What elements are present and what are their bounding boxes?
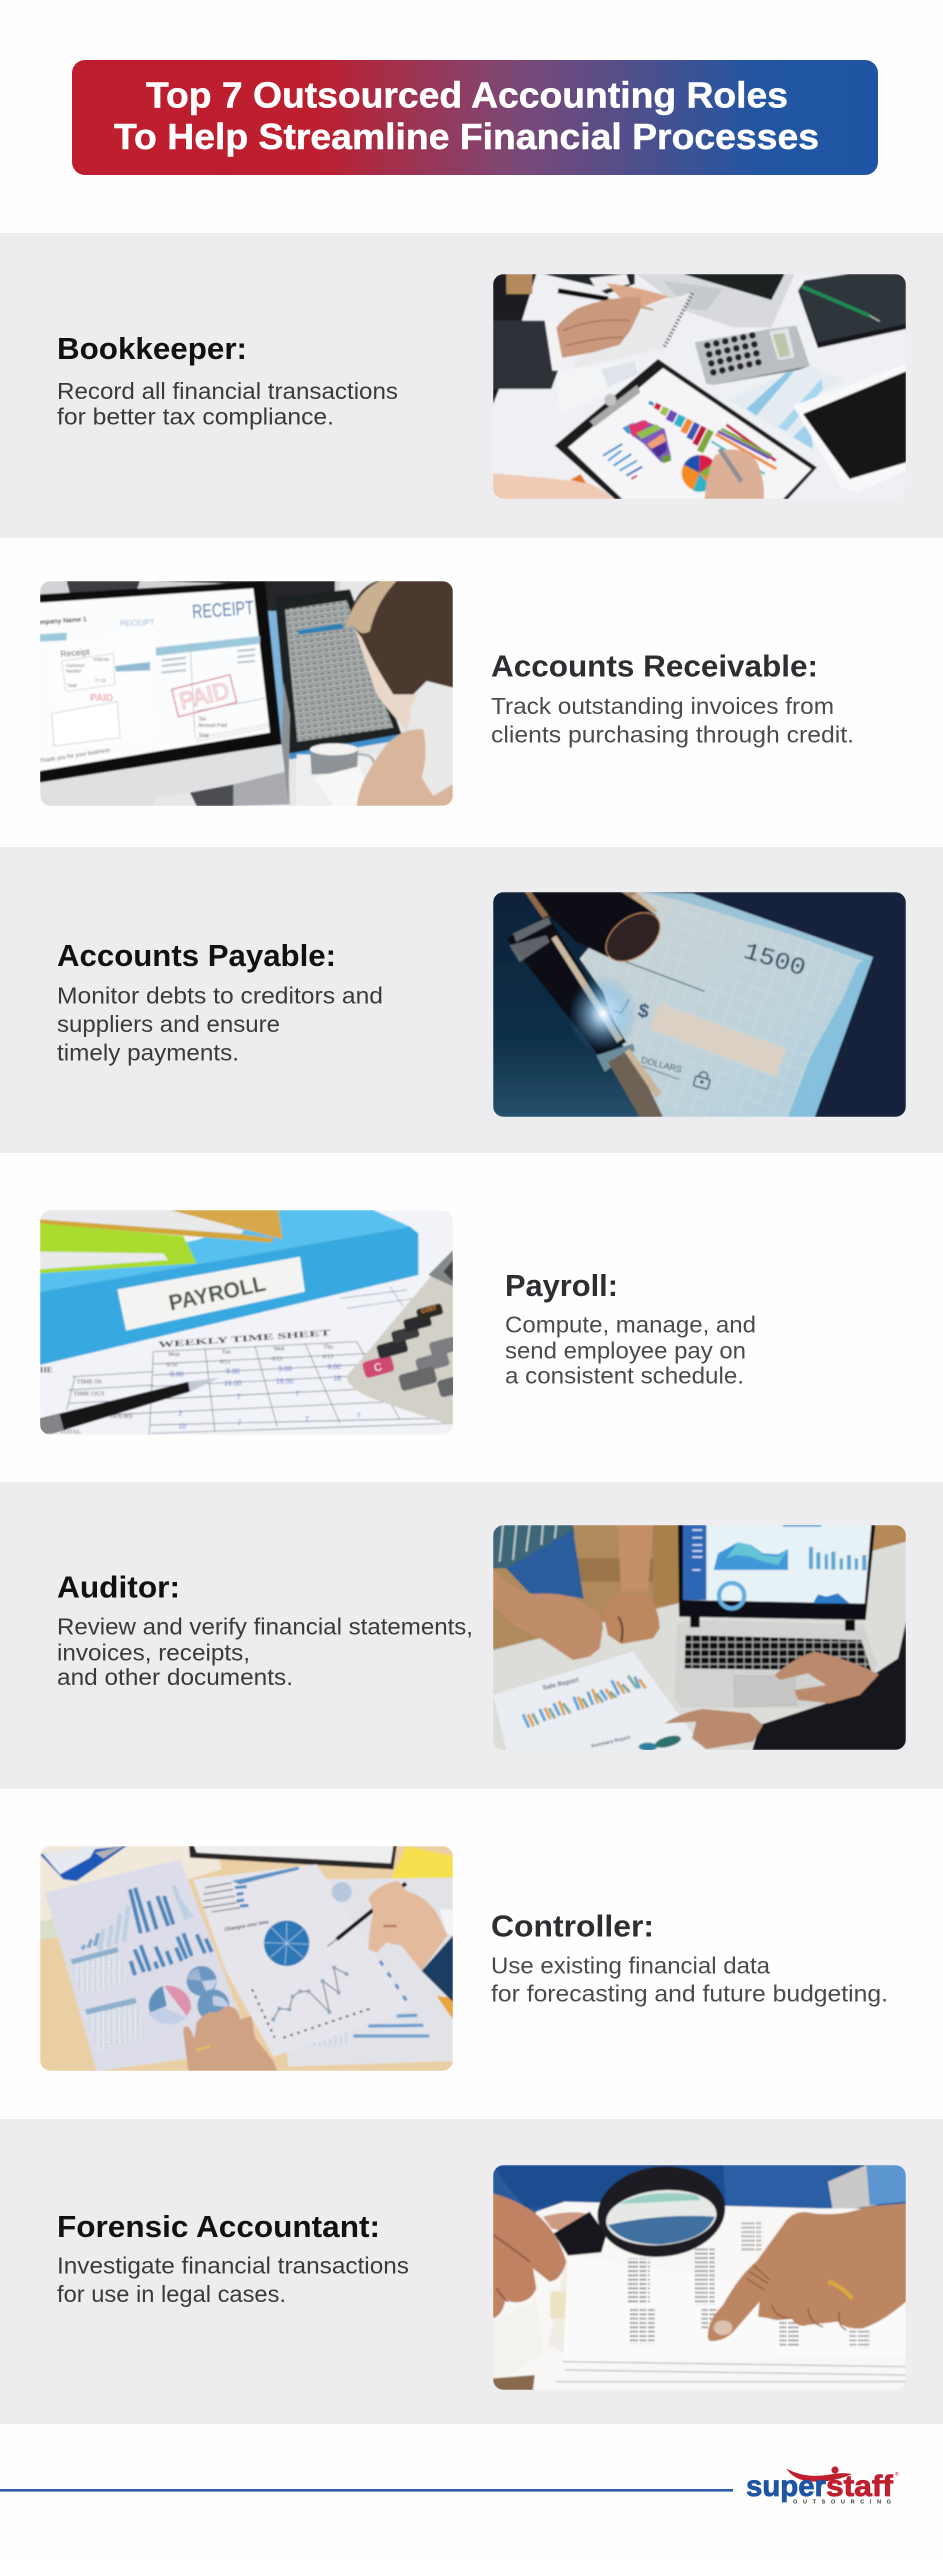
photo: payroll binder on a weekly time sheet: 16.00 [276, 1378, 294, 1385]
photo: man on phone with receipt on monitor: Receipt [60, 646, 91, 659]
photo: payroll binder on a weekly time sheet: 16 [333, 1376, 341, 1383]
photo: payroll binder on a weekly time sheet [40, 1210, 453, 1435]
footer rule [0, 2489, 733, 2492]
photo: payroll binder on a weekly time sheet: 7 [357, 1413, 361, 1420]
photo: payroll binder on a weekly time sheet: 10 [178, 1424, 186, 1431]
heading: Forensic Accountant: Forensic Accountant: [57, 2209, 380, 2244]
photo: payroll binder on a weekly time sheet: 7 [295, 1391, 299, 1398]
description: Accounts Payable: Monitor debts to creditors and [57, 982, 383, 1008]
title banner: To Help Streamline Financial Processes [114, 116, 819, 157]
photo: payroll binder on a weekly time sheet: C [373, 1361, 384, 1375]
panel: Payroll [39, 1210, 756, 1436]
description: Payroll: a consistent schedule. [505, 1362, 744, 1388]
heading: Accounts Receivable: Accounts Receivable: [491, 648, 818, 684]
description: Controller [491, 1952, 888, 2006]
heading: Bookkeeper: Bookkeeper: [57, 331, 247, 366]
photo: man on phone with receipt on monitor: Total [198, 733, 209, 739]
panel: Forensic Accountant [0, 2119, 943, 2424]
photo: fountain pen on a check: 1500 [740, 939, 808, 983]
description: Forensic Accountant: for use in legal cases. [57, 2281, 286, 2307]
description: Accounts Receivable: Track outstanding invoices from [491, 693, 834, 719]
photo: payroll binder on a weekly time sheet: TOTAL [60, 1428, 81, 1435]
photo: man on phone with receipt on monitor: 0700.00 [93, 657, 110, 662]
photo: payroll binder on a weekly time sheet: 7 [237, 1394, 241, 1401]
photo: payroll binder on a weekly time sheet: 9.00 [278, 1366, 292, 1373]
description: Forensic Accountant: Investigate financial transactions [57, 2252, 409, 2278]
logo: SuperStaff Outsourcing: staff [826, 2470, 894, 2503]
description: Accounts Payable: timely payments. [57, 1040, 239, 1066]
description: Accounts Receivable [491, 693, 854, 748]
description: Bookkeeper: Record all financial transactions [57, 378, 398, 404]
panel: Bookkeeper [0, 233, 943, 538]
description: Payroll [505, 1312, 756, 1388]
photo: payroll binder on a weekly time sheet: HOURS [110, 1413, 133, 1420]
photo: hands with magnifying glass over documents [493, 2165, 906, 2390]
photo: man on phone with receipt on monitor: PAID [177, 677, 232, 714]
photo: man on phone with receipt on monitor: Customer [66, 663, 85, 668]
logo: SuperStaff Outsourcing: ® [895, 2471, 899, 2478]
heading: Payroll: Payroll: [505, 1268, 618, 1303]
description: Controller: for forecasting and future budgeting. [491, 1980, 888, 2006]
description: Payroll: send employee pay on [505, 1338, 746, 1364]
photo: team reviewing a sales report and laptop: Sale Report [542, 1677, 580, 1692]
title banner [72, 60, 878, 175]
heading: Controller: Controller: [491, 1908, 654, 1944]
photo: man on phone with receipt on monitor: RECEIPT [192, 598, 255, 623]
panel: Accounts Payable [0, 847, 943, 1153]
photo: payroll binder on a weekly time sheet: Tue [222, 1349, 231, 1355]
photo: man on phone with receipt on monitor: 77.15 [95, 678, 106, 683]
photo: man on phone with receipt on monitor: RECEIPT [120, 618, 155, 628]
heading: Auditor: Auditor: [57, 1570, 180, 1604]
photo: team reviewing a sales report and laptop: Summary Report [590, 1735, 631, 1750]
description: Auditor: and other documents. [57, 1664, 293, 1690]
description: Accounts Payable: suppliers and ensure [57, 1011, 280, 1037]
photo: payroll binder on a weekly time sheet: HE [40, 1365, 53, 1375]
photo: payroll binder on a weekly time sheet: 7 [305, 1416, 309, 1423]
photo: fountain pen on a check: DOLLARS [640, 1055, 683, 1075]
photo: payroll binder on a weekly time sheet: TIME IN [77, 1378, 102, 1385]
photo: payroll binder on a weekly time sheet: TIME OUT [73, 1390, 105, 1397]
photo: payroll binder on a weekly time sheet: PAYROLL [167, 1271, 268, 1316]
photo: payroll binder on a weekly time sheet: WEEKLY TIME SHEET [158, 1327, 331, 1349]
description: Auditor [57, 1614, 473, 1690]
photo: payroll binder on a weekly time sheet: COST [421, 1305, 438, 1315]
photo: payroll binder on a weekly time sheet: 6/10 [167, 1363, 177, 1369]
photo: fountain pen on a check: $ [636, 1000, 651, 1023]
photo: hands reviewing printed charts on a wooden desk [40, 1846, 453, 2071]
photo: payroll binder on a weekly time sheet: 7 [237, 1420, 241, 1427]
photo: man on phone with receipt on monitor: Amount Paid [198, 723, 227, 729]
logo: SuperStaff Outsourcing: OUTSOURCING [793, 2500, 891, 2506]
photo: payroll binder on a weekly time sheet: Thu [323, 1345, 333, 1351]
logo: SuperStaff Outsourcing [746, 2466, 899, 2506]
photo: payroll binder on a weekly time sheet: 6/13 [323, 1355, 333, 1361]
description: Auditor: Review and verify financial statements, [57, 1614, 473, 1640]
photo: fountain pen on a check [493, 892, 906, 1117]
photo: man on phone with receipt on monitor: PAID [90, 693, 113, 704]
photo: man on phone with receipt on monitor: Tax [198, 716, 207, 722]
title banner: Top 7 Outsourced Accounting Roles [146, 74, 788, 116]
photo: man on phone with receipt on monitor [40, 581, 453, 806]
photo: payroll binder on a weekly time sheet: 6/12 [272, 1357, 282, 1363]
photo: payroll binder on a weekly time sheet: 9.00 [226, 1369, 240, 1376]
description: Bookkeeper [57, 378, 398, 430]
photo: man on phone with receipt on monitor: Number [66, 669, 82, 674]
logo: SuperStaff Outsourcing: super [746, 2470, 826, 2503]
panel: Controller [40, 1846, 888, 2071]
photo: payroll binder on a weekly time sheet: 16.00 [224, 1381, 242, 1388]
description: Bookkeeper: for better tax compliance. [57, 404, 334, 430]
description: Payroll: Compute, manage, and [505, 1312, 756, 1338]
photo: man on phone with receipt on monitor: mpany Name 1 [40, 616, 87, 626]
photo: hands with charts, calculator and tablet [493, 274, 906, 499]
photo: payroll binder on a weekly time sheet: 2 [178, 1410, 182, 1417]
photo: payroll binder on a weekly time sheet: Wed [273, 1347, 284, 1353]
photo: payroll binder on a weekly time sheet: 8.00 [170, 1372, 184, 1379]
panel: Accounts Receivable [39, 581, 854, 806]
description: Forensic Accountant [57, 2252, 409, 2307]
photo: hands reviewing printed charts on a wooden desk: Changes over time [224, 1919, 270, 1933]
photo: man on phone with receipt on monitor: Total [67, 683, 77, 688]
description: Auditor: invoices, receipts, [57, 1640, 250, 1666]
description: Accounts Payable [57, 982, 383, 1066]
description: Controller: Use existing financial data [491, 1952, 770, 1978]
photo: payroll binder on a weekly time sheet: 6/11 [220, 1359, 230, 1365]
photo: payroll binder on a weekly time sheet: 9.00 [327, 1364, 341, 1371]
description: Accounts Receivable: clients purchasing through credit. [491, 722, 854, 748]
panel: Auditor [0, 1482, 943, 1789]
photo: team reviewing a sales report and laptop [493, 1525, 906, 1750]
photo: payroll binder on a weekly time sheet: Mon [168, 1352, 180, 1358]
photo: man on phone with receipt on monitor: Thank you for your business [39, 748, 111, 765]
heading: Accounts Payable: Accounts Payable: [57, 938, 336, 973]
